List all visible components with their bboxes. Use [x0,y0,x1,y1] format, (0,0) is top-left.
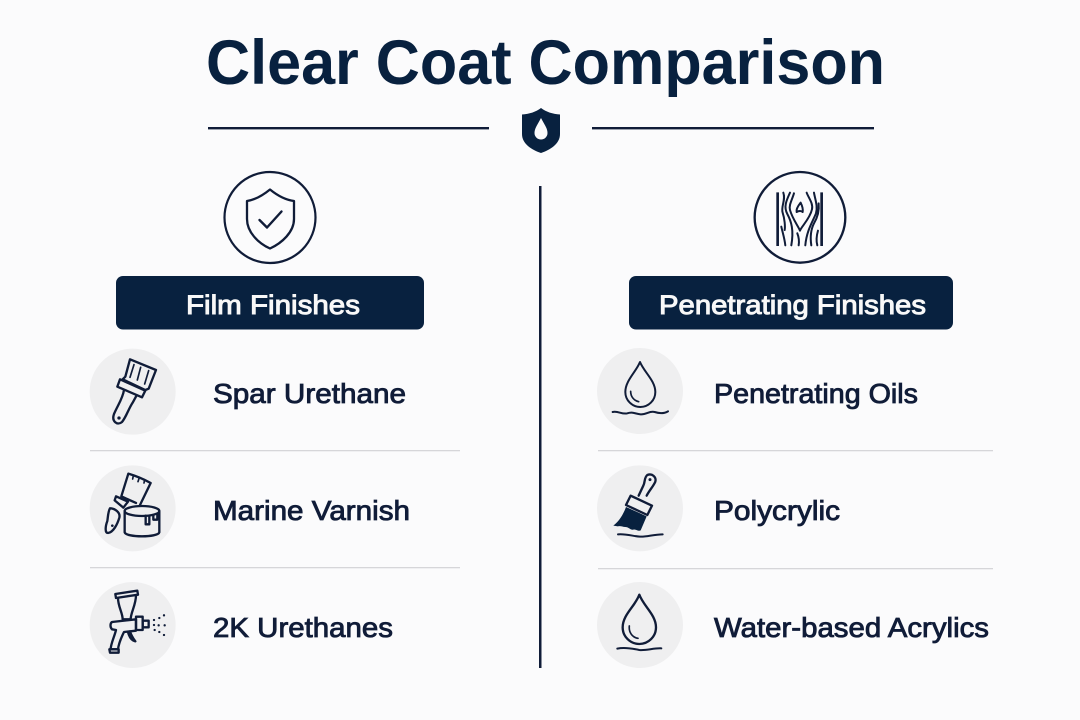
title divider with shield icon [208,108,874,153]
label: Polycrylic [714,495,840,526]
icon: paint brush [90,349,176,435]
label: 2K Urethanes [213,612,393,643]
icon: spray gun [90,582,176,668]
label: Water-based Acrylics [714,612,989,643]
item: penetrating oils [597,348,918,434]
icon: oil drop with wave [597,348,683,434]
item: 2k urethanes [90,582,393,668]
heading: film finishes [116,276,424,330]
icon: wood grain [755,172,845,263]
icon: water drop with wave [597,582,683,668]
label: Spar Urethane [213,378,406,409]
item: spar urethane [90,349,406,435]
icon: brush and paint can [90,465,176,551]
label: Marine Varnish [213,495,410,526]
heading: penetrating finishes [629,276,953,330]
panel: penetrating finishes [597,172,993,668]
title: Clear Coat Comparison [206,28,885,98]
heading: film finishes: Film Finishes [186,290,360,320]
icon: filled paint brush [597,465,683,551]
item: marine varnish [90,465,410,551]
panel: film finishes [90,172,460,668]
item: polycrylic [597,465,840,551]
item: water-based acrylics [597,582,989,668]
label: Penetrating Oils [714,378,918,409]
icon: shield with check [224,172,316,263]
heading: penetrating finishes: Penetrating Finishes [659,290,926,320]
center divider [539,186,542,668]
